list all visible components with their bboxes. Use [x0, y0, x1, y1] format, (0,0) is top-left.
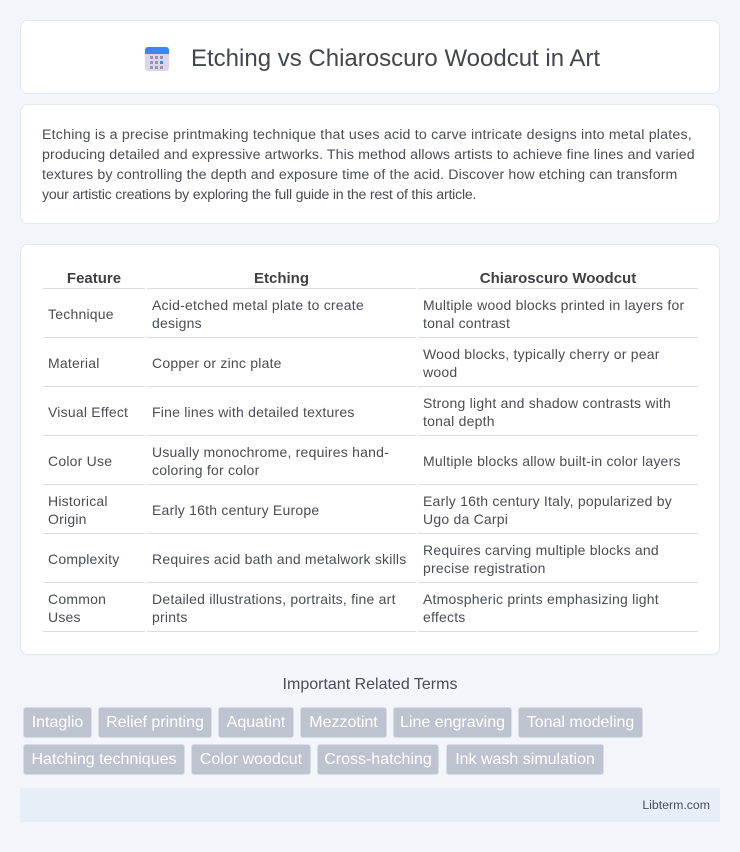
tag	[446, 744, 604, 775]
intro text: Etching is a precise printmaking technique that uses acid to carve intricate designs into metal plates,	[42, 127, 692, 143]
row: Color Use: Color Use	[48, 453, 112, 469]
row: Material: Material	[48, 355, 100, 371]
comparison table: Fine lines with detailed textures	[152, 404, 355, 420]
comparison table: Requires carving multiple blocks and	[423, 542, 659, 558]
intro text: producing detailed and expressive artworks. This method allows artists to achieve fine lines and varied	[42, 147, 695, 163]
intro text	[42, 127, 695, 203]
intro text: textures by controlling the depth and exposure time of the acid. Discover how etching can transform	[42, 167, 677, 183]
comparison table: Wood blocks, typically cherry or pear	[423, 346, 660, 362]
tag: Hatching techniques	[32, 751, 176, 768]
tag: Mezzotint	[309, 714, 378, 731]
tag	[300, 707, 387, 738]
tag: Cross-hatching	[324, 751, 432, 768]
row: Historical Origin	[48, 493, 108, 527]
comparison table: precise registration	[423, 560, 546, 576]
intro text: your artistic creations by exploring the full guide in the rest of this article.	[42, 187, 476, 203]
comparison table: effects	[423, 609, 466, 625]
row: Common Uses	[48, 591, 106, 625]
tag	[98, 707, 212, 738]
comparison table: prints	[152, 609, 188, 625]
comparison table: designs	[152, 315, 202, 331]
comparison table: Multiple wood blocks printed in layers for	[423, 297, 684, 313]
title card	[20, 20, 720, 94]
comparison table: Acid-etched metal plate to create	[152, 297, 364, 313]
comparison table: Early 16th century Italy, popularized by	[423, 493, 672, 509]
comparison table: tonal depth	[423, 413, 495, 429]
row: Complexity: Complexity	[48, 551, 119, 567]
comparison table: Requires acid bath and metalwork skills	[152, 551, 406, 567]
header: Chiaroscuro Woodcut: Chiaroscuro Woodcut	[480, 270, 636, 287]
tag: Relief printing	[106, 714, 204, 731]
tag	[23, 744, 185, 775]
footer credit: Libterm.com	[642, 798, 710, 812]
comparison table: tonal contrast	[423, 315, 510, 331]
comparison table: Usually monochrome, requires hand-	[152, 444, 389, 460]
comparison table: Copper or zinc plate	[152, 355, 282, 371]
tag	[218, 707, 294, 738]
tag	[317, 744, 439, 775]
tag: Line engraving	[400, 714, 505, 731]
intro card	[20, 104, 720, 224]
row: Technique: Technique	[48, 306, 114, 322]
comparison table: Multiple blocks allow built-in color layers	[423, 453, 681, 469]
title: Etching vs Chiaroscuro Woodcut in Art	[191, 45, 600, 72]
row: Visual Effect: Visual Effect	[48, 404, 128, 420]
comparison table: Ugo da Carpi	[423, 511, 508, 527]
icon: calendar	[145, 47, 169, 71]
tag	[518, 707, 643, 738]
tag: Intaglio	[32, 714, 83, 731]
related terms tags	[23, 707, 643, 775]
footer bar	[20, 788, 720, 822]
table card	[20, 244, 720, 655]
tag: Tonal modeling	[527, 714, 634, 731]
header: Etching: Etching	[254, 270, 309, 287]
tag	[191, 744, 311, 775]
header: Feature: Feature	[67, 270, 121, 287]
comparison table: Detailed illustrations, portraits, fine art	[152, 591, 396, 607]
row: Common Uses: Common	[48, 591, 106, 607]
tag: Aquatint	[227, 714, 285, 731]
comparison table: Strong light and shadow contrasts with	[423, 395, 671, 411]
row: Historical Origin: Origin	[48, 511, 87, 527]
comparison table: wood	[423, 364, 457, 380]
comparison table: Atmospheric prints emphasizing light	[423, 591, 659, 607]
tag: Ink wash simulation	[455, 751, 595, 768]
comparison table: coloring for color	[152, 462, 259, 478]
comparison table: Early 16th century Europe	[152, 502, 319, 518]
tag	[393, 707, 512, 738]
related terms heading: Important Related Terms	[283, 676, 457, 693]
comparison table	[43, 270, 698, 632]
row: Common Uses: Uses	[48, 609, 81, 625]
tag: Color woodcut	[200, 751, 302, 768]
row: Historical Origin: Historical	[48, 493, 108, 509]
tag	[23, 707, 92, 738]
